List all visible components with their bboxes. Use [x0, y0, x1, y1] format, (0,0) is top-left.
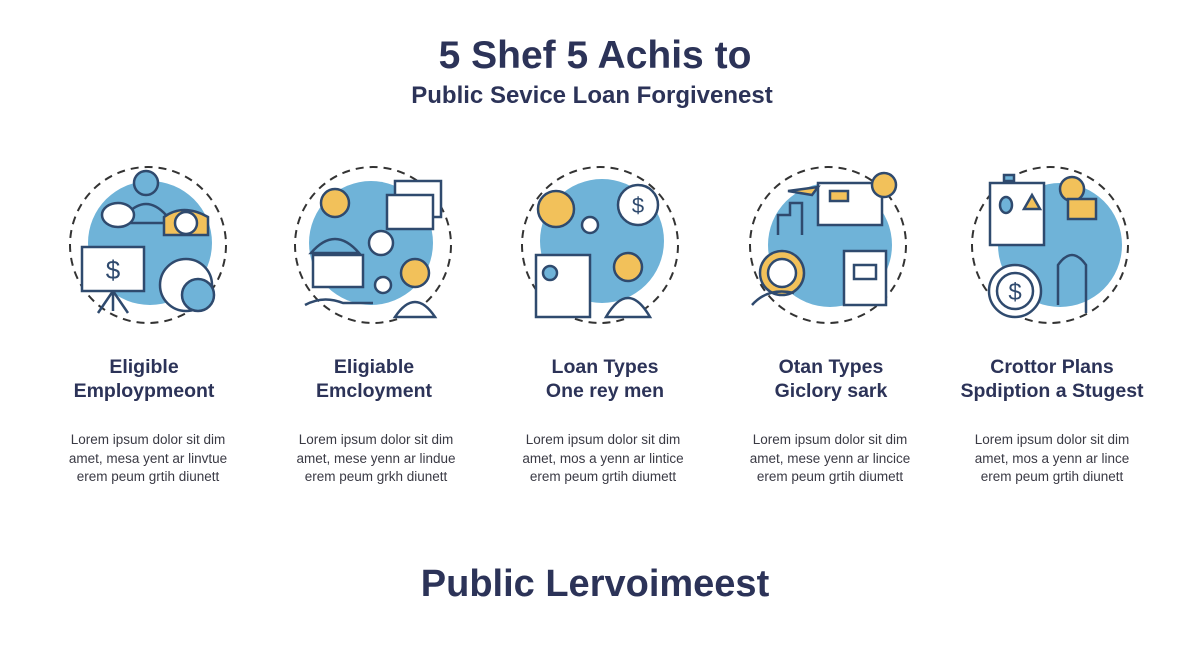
panel 4 text: erem peum grtih diumett	[757, 469, 903, 484]
panel 4 text	[750, 432, 910, 484]
panel 1 text: erem peum grtih diunett	[77, 469, 219, 484]
panel 4 icon	[749, 166, 907, 324]
panel 5 text	[975, 432, 1129, 484]
panel 1 heading: Eligible	[109, 356, 179, 378]
panel 5 heading	[960, 356, 1144, 402]
panel 1 text: amet, mesa yent ar linvtue	[69, 450, 227, 466]
panel 5 text: Lorem ipsum dolor sit dim	[975, 432, 1129, 447]
panel 2 heading: Emcloyment	[316, 380, 432, 402]
panel 5 heading: Crottor Plans	[990, 356, 1114, 378]
panel 3 text: erem peum grtih diumett	[530, 469, 676, 484]
panel 3 heading	[546, 356, 664, 402]
panel 1 text: Lorem ipsum dolor sit dim	[71, 432, 225, 447]
panel 3 heading: Loan Types	[552, 356, 658, 378]
panel 2 heading	[316, 356, 432, 402]
panel 4 heading: Giclory sark	[775, 380, 887, 402]
panel 2 heading: Eligiable	[334, 356, 414, 378]
panel 1 text	[69, 432, 227, 484]
panel 5 text: erem peum grtih diunett	[981, 469, 1123, 484]
panel 4 heading	[775, 356, 888, 402]
panel 3 icon	[521, 166, 679, 324]
panel 3 text	[522, 432, 684, 484]
panel 3 heading: One rey men	[546, 380, 664, 402]
panel 5 text: amet, mos a yenn ar lince	[975, 450, 1129, 466]
panel 2 text: erem peum grkh diunett	[305, 469, 447, 484]
panel 2 icon	[294, 166, 452, 324]
panel 5 icon	[971, 166, 1129, 324]
panel 1 heading: Employpmeont	[74, 380, 214, 402]
panel 5 heading: Spdiption a Stugest	[960, 380, 1144, 402]
panel 4 text: amet, mese yenn ar lincice	[750, 450, 910, 466]
footer heading: Public Lervoimeest	[421, 563, 769, 605]
subtitle: Public Sevice Loan Forgivenest	[411, 82, 773, 109]
title: 5 Shef 5 Achis to	[439, 34, 751, 77]
panel 3 text: amet, mos a yenn ar lintice	[522, 450, 684, 466]
panel 4 heading: Otan Types	[779, 356, 883, 378]
panel 4 text: Lorem ipsum dolor sit dim	[753, 432, 907, 447]
panel 2 text: Lorem ipsum dolor sit dim	[299, 432, 453, 447]
panel 2 text: amet, mese yenn ar lindue	[296, 450, 456, 466]
panel 3 text: Lorem ipsum dolor sit dim	[526, 432, 680, 447]
panel 2 text	[296, 432, 456, 484]
panel 5 icon: $	[1008, 279, 1022, 306]
panel 1 icon: $	[106, 255, 121, 285]
panel 1 heading	[74, 356, 214, 402]
panel 1 icon	[69, 166, 227, 324]
panel 3 icon: $	[632, 193, 644, 218]
